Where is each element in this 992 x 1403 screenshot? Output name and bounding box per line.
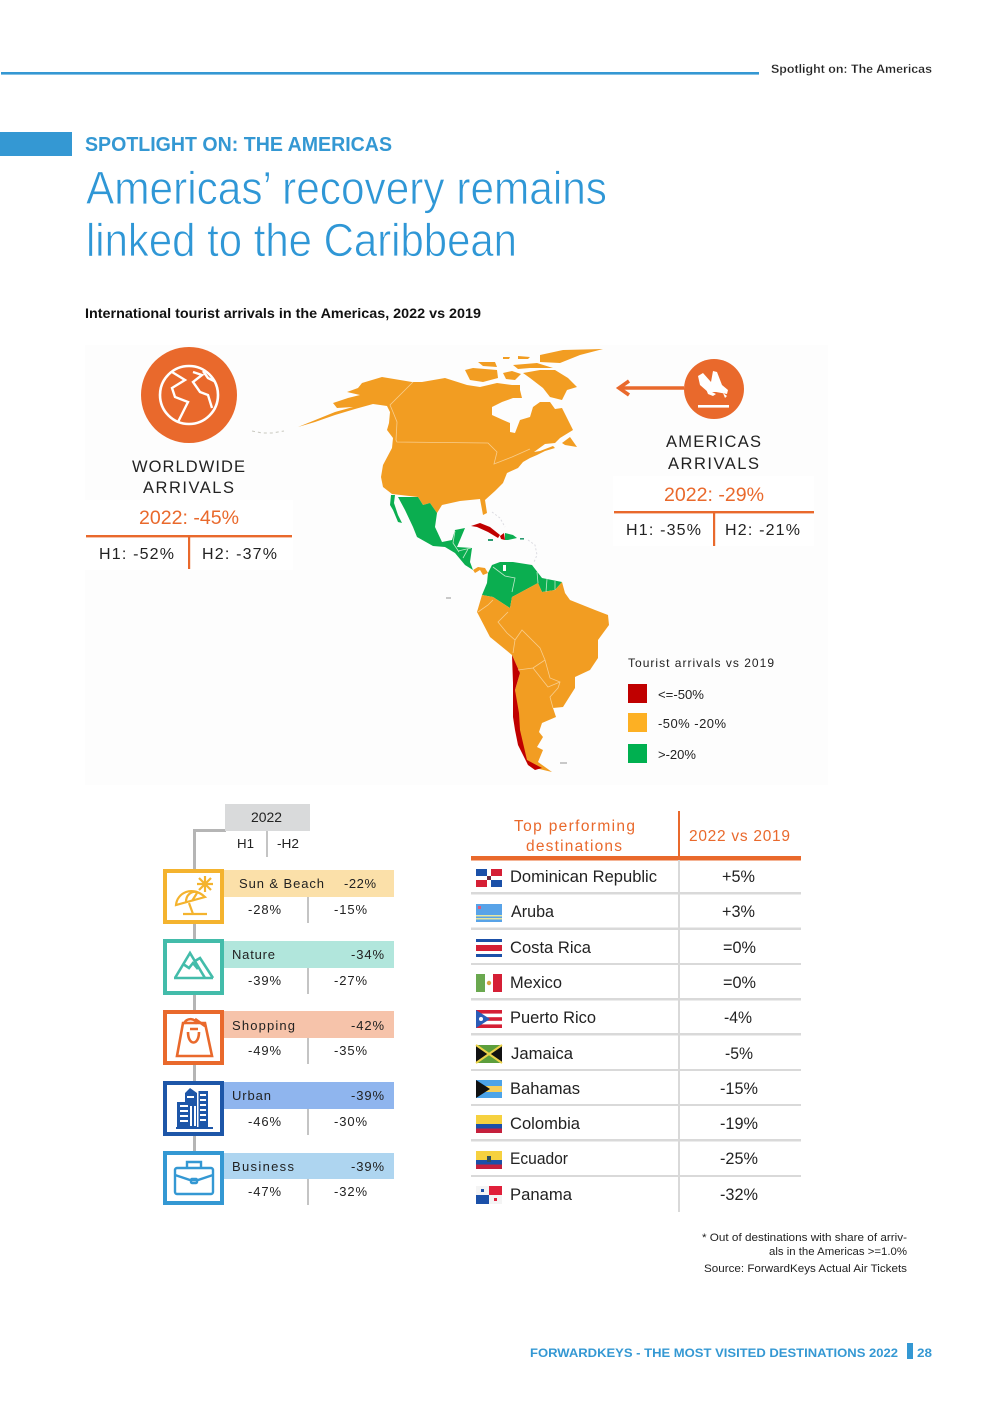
- table header: 2022 vs 2019: [689, 828, 790, 845]
- panel: travel purpose by half-year: [165, 804, 394, 1205]
- Panama and Costa Rica: [473, 567, 488, 575]
- page footer: 28: [917, 1346, 932, 1360]
- table header: destinations: [526, 838, 622, 855]
- table header: Top performing: [514, 818, 635, 835]
- Lake Maracaibo: [503, 565, 506, 571]
- row: Urban: -30%: [334, 1114, 367, 1129]
- icon: plane landing with arrow: [619, 359, 744, 419]
- 2022 column header: 2022: [251, 809, 282, 825]
- flag: Dominican Republic: [476, 869, 502, 887]
- Canada and USA borders: [390, 382, 530, 464]
- title: [86, 162, 607, 266]
- flag: Bahamas: [476, 1080, 502, 1098]
- row: Bahamas: Bahamas: [510, 1079, 580, 1098]
- icon: briefcase: [175, 1162, 213, 1194]
- row: Mexico: Mexico: [510, 973, 562, 992]
- row: Ecuador: Ecuador: [510, 1149, 568, 1168]
- icon: beach umbrella: [176, 876, 213, 914]
- value: H1 and H2 worldwide: H1: -52%: [99, 546, 174, 563]
- table grid lines: [471, 860, 801, 1212]
- value: H1 and H2 worldwide: H2: -37%: [202, 546, 277, 563]
- row: Mexico: [476, 973, 756, 992]
- table header: [471, 811, 801, 860]
- row: Costa Rica: [476, 938, 756, 957]
- row: Jamaica: -5%: [725, 1044, 753, 1063]
- map legend: [628, 656, 774, 763]
- value: H1 and H2 Americas: [626, 522, 800, 539]
- page footer: [530, 1343, 932, 1360]
- row: Urban: -46%: [248, 1114, 281, 1129]
- row: Aruba: +3%: [722, 902, 755, 921]
- North America: Canada and USA: [298, 349, 603, 515]
- flag: Colombia: [476, 1115, 502, 1133]
- row: Dominican Republic: Dominican Republic: [510, 867, 657, 886]
- row: Panama: -32%: [720, 1185, 758, 1204]
- row: Shopping: [165, 1011, 394, 1064]
- label: worldwide arrivals: WORLDWIDE: [132, 458, 245, 476]
- rest of South America: [477, 582, 609, 772]
- row: Sun & Beach: [165, 870, 394, 923]
- row: Shopping: -35%: [334, 1043, 367, 1058]
- map legend: >-20%: [658, 747, 696, 762]
- row: Shopping: Shopping: [232, 1018, 295, 1033]
- icon: shopping bag: [177, 1019, 212, 1056]
- small outlying islands: [446, 597, 567, 764]
- section marker block: [0, 132, 72, 156]
- chart subtitle: International tourist arrivals in the Americas, 2022 vs 2019: [85, 305, 481, 321]
- icon: mountains: [174, 953, 213, 978]
- row: Urban: [165, 1082, 394, 1135]
- Mexico and Central America: [390, 495, 473, 570]
- row: Nature: -39%: [248, 973, 281, 988]
- row: Nature: -27%: [334, 973, 367, 988]
- South America borders: [478, 567, 560, 708]
- Chile: [512, 655, 542, 770]
- row: Business: -32%: [334, 1184, 367, 1199]
- row: Aruba: [476, 902, 755, 922]
- flag: Costa Rica: [476, 939, 502, 957]
- row: Bahamas: -15%: [720, 1079, 758, 1098]
- row: Shopping: -49%: [248, 1043, 281, 1058]
- row: Ecuador: -25%: [720, 1149, 758, 1168]
- page footer: FORWARDKEYS - THE MOST VISITED DESTINATIONS 2022: [530, 1346, 898, 1360]
- row: Mexico: =0%: [723, 973, 756, 992]
- title: Americas’ recovery remains: [86, 162, 607, 214]
- 2022 column header: H1: [237, 836, 254, 851]
- panel: worldwide arrivals: ARRIVALS: [143, 479, 234, 497]
- row: Business: -47%: [248, 1184, 281, 1199]
- Arctic islands: [523, 370, 577, 400]
- row: Urban: -39%: [351, 1088, 384, 1103]
- panel: worldwide arrivals: [85, 347, 293, 570]
- flag: Panama: [476, 1186, 502, 1204]
- Hispaniola and islands: [488, 512, 537, 562]
- icon: city buildings: [176, 1088, 213, 1129]
- row: Sun & Beach: -22%: [344, 876, 376, 891]
- row: Panama: [476, 1185, 758, 1204]
- row: Jamaica: [476, 1044, 753, 1063]
- label: Americas arrivals: AMERICAS: [666, 433, 761, 451]
- title: linked to the Caribbean: [86, 214, 517, 266]
- row: Colombia: Colombia: [510, 1114, 581, 1133]
- icon: globe: [141, 347, 237, 443]
- footnote and source: als in the Americas >=1.0%: [769, 1246, 907, 1258]
- row: Nature: Nature: [232, 947, 275, 962]
- row: Costa Rica: =0%: [723, 938, 756, 957]
- 2022 column header: -H2: [277, 836, 299, 851]
- value: 2022 Americas: 2022: -29%: [664, 485, 764, 506]
- Newfoundland: [562, 437, 577, 447]
- section heading: SPOTLIGHT ON: THE AMERICAS: [85, 134, 392, 156]
- footnote and source: [702, 1232, 908, 1275]
- flag: Ecuador: [476, 1151, 502, 1169]
- value: 2022 worldwide: 2022: -45%: [139, 508, 239, 529]
- row: Urban: Urban: [232, 1088, 271, 1103]
- map panel background: [85, 345, 828, 785]
- row: Panama: Panama: [510, 1185, 573, 1204]
- row: Ecuador: [476, 1149, 758, 1169]
- 2022 column header: [225, 804, 310, 857]
- flag: Aruba: [476, 904, 502, 922]
- value: H1 and H2 worldwide: [99, 546, 277, 563]
- row: Costa Rica: Costa Rica: [510, 938, 592, 957]
- panel: Americas arrivals: [613, 359, 814, 546]
- panel: Americas arrivals: ARRIVALS: [668, 455, 759, 473]
- value: H1 and H2 Americas: H2: -21%: [725, 522, 800, 539]
- row: Jamaica: Jamaica: [511, 1044, 574, 1063]
- footnote and source: Source: ForwardKeys Actual Air Tickets: [704, 1263, 908, 1275]
- running header: Spotlight on: The Americas: [771, 62, 932, 76]
- row: Nature: [165, 941, 394, 994]
- row: Puerto Rico: -4%: [724, 1008, 752, 1027]
- row: Business: [165, 1153, 394, 1205]
- flag: Mexico: [476, 974, 502, 992]
- value: H1 and H2 Americas: H1: -35%: [626, 522, 701, 539]
- map legend: Tourist arrivals vs 2019: [628, 656, 774, 670]
- northern South America: [482, 562, 562, 608]
- map legend: <=-50%: [658, 687, 704, 702]
- map legend: -50% -20%: [658, 716, 726, 731]
- row: Colombia: [476, 1114, 758, 1133]
- row: Puerto Rico: Puerto Rico: [510, 1008, 596, 1027]
- row: Puerto Rico: [476, 1008, 752, 1028]
- row: Sun & Beach: -28%: [248, 902, 281, 917]
- row: Dominican Republic: [476, 867, 755, 887]
- row: Shopping: -42%: [351, 1018, 384, 1033]
- row: Bahamas: [476, 1079, 758, 1098]
- map of the Americas: [252, 349, 609, 772]
- table: top performing destinations: [471, 811, 801, 1212]
- row: Dominican Republic: +5%: [722, 867, 755, 886]
- footnote and source: * Out of destinations with share of arriv-: [702, 1232, 907, 1244]
- row: Business: -39%: [351, 1159, 384, 1174]
- Central America borders: [453, 531, 471, 558]
- row: Colombia: -19%: [720, 1114, 758, 1133]
- row: Sun & Beach: -15%: [334, 902, 367, 917]
- flag: Puerto Rico: [476, 1010, 502, 1028]
- Cuba: [471, 523, 500, 538]
- flag: Jamaica: [476, 1045, 502, 1063]
- row: Aruba: Aruba: [511, 902, 555, 921]
- Aleutian chain: [252, 431, 284, 433]
- row: Sun & Beach: Sun & Beach: [239, 876, 324, 891]
- row: Business: Business: [232, 1159, 294, 1174]
- row: Nature: -34%: [351, 947, 384, 962]
